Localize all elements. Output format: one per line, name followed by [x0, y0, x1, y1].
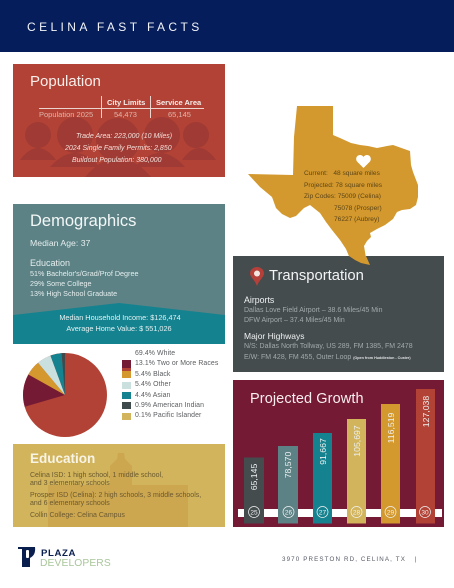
area and zip text: 75078 (Prosper): [334, 205, 382, 212]
income text: [59, 313, 181, 332]
population table: [39, 96, 204, 119]
heading: Demographics: [30, 212, 136, 230]
pie legend: 5.4% Black: [135, 371, 170, 378]
icon: texas shape: [248, 106, 418, 256]
education text: Prosper ISD (Celina): 2 high schools, 3 middle schools,: [30, 492, 201, 499]
icon: school building: [48, 453, 188, 527]
education stats: 13% High School Graduate: [30, 289, 117, 298]
panel: education: [13, 444, 225, 527]
panel: transportation: [233, 256, 444, 372]
education text: Celina ISD: 1 high school, 1 middle school,: [30, 472, 163, 479]
pie legend: 69.4% White: [135, 350, 175, 357]
pie legend: 0.1% Pacific Islander: [135, 412, 201, 419]
bar chart: 105,697: [352, 425, 362, 457]
pie legend: 13.1% Two or More Races: [135, 360, 218, 367]
major highways: [244, 331, 413, 360]
header band: [0, 0, 454, 52]
panel: projected growth: [233, 380, 444, 527]
education text: and 6 elementary schools: [30, 500, 110, 507]
bar chart: 25: [250, 510, 258, 516]
bar chart: 127,038: [421, 396, 431, 427]
airports: [244, 295, 383, 324]
bar chart: 28: [353, 510, 360, 516]
population table: Population 2025: [39, 110, 93, 119]
area and zip text: 76227 (Aubrey): [334, 216, 379, 223]
bar chart: 26: [285, 510, 292, 516]
area and zip text: Projected: 78 square miles: [304, 182, 382, 188]
bar chart: 91,667: [318, 438, 328, 465]
teal income band: [13, 303, 225, 344]
education text: Collin College: Celina Campus: [30, 512, 125, 519]
population stats: 2024 Single Family Permits: 2,850: [65, 145, 172, 152]
heading: Population: [30, 73, 101, 90]
bar chart: 30: [421, 510, 429, 516]
pie legend: 4.4% Asian: [135, 392, 170, 399]
education stats: Education: [30, 258, 70, 268]
population stats: Trade Area: 223,000 (10 Miles): [76, 133, 172, 140]
icon: people silhouettes: [20, 117, 216, 177]
timeline strip: [238, 509, 442, 517]
texas tip overlap: [349, 256, 370, 265]
income text: Average Home Value: $ 551,026: [66, 324, 172, 332]
major highways: N/S: Dallas North Tollway, US 289, FM 1385, FM 2478: [244, 343, 413, 350]
bar chart: 116,519: [386, 412, 396, 443]
population table: Service Area: [156, 98, 201, 106]
pie chart: [23, 353, 107, 437]
education text: and 3 elementary schools: [30, 480, 110, 487]
icon: heart: [356, 155, 371, 168]
population stats: [65, 132, 172, 164]
bar chart: 29: [387, 510, 394, 516]
population table: City Limits: [107, 98, 145, 106]
footer address: 3970 PRESTON RD, CELINA, TX |: [282, 556, 417, 563]
panel: demographics: [13, 204, 225, 344]
median age: Median Age: 37: [30, 238, 90, 248]
area and zip text: Zip Codes: 75009 (Celina): [304, 193, 381, 200]
pie legend: [122, 350, 218, 420]
brand name: PLAZA: [41, 548, 76, 558]
title: CELINA FAST FACTS: [27, 20, 203, 34]
education stats: 51% Bachelor's/Grad/Prof Degree: [30, 269, 138, 278]
airports: Airports: [244, 295, 274, 305]
population stats: Buildout Population: 380,000: [72, 157, 162, 164]
logo: plaza developers: DEVELOPERS: [40, 558, 111, 569]
airports: DFW Airport – 37.4 Miles/45 Min: [244, 317, 345, 324]
icon: map pin: [250, 267, 264, 286]
airports: Dallas Love Field Airport – 38.6 Miles/45 Min: [244, 307, 383, 314]
major highways: E/W: FM 428, FM 455, Outer Loop (Open from Huddleston - Custer): [244, 354, 411, 360]
pie legend: 0.9% American Indian: [135, 402, 204, 409]
area and zip text: Current: 48 square miles: [304, 170, 380, 177]
population table: 65,145: [168, 110, 191, 119]
area and zip text: [304, 170, 382, 223]
heading: Transportation: [269, 268, 364, 284]
icon: logo mark: [18, 547, 36, 567]
income text: Median Household Income: $126,474: [59, 313, 181, 322]
pie legend: 5.4% Other: [135, 381, 171, 388]
bar chart: 65,145: [249, 464, 259, 490]
population table: 54,473: [114, 110, 137, 119]
education text: [30, 472, 201, 519]
education stats: 29% Some College: [30, 279, 92, 288]
bar chart: [244, 389, 435, 524]
education stats: [30, 258, 138, 298]
panel: population: [13, 64, 225, 177]
bar chart: 27: [319, 510, 326, 516]
major highways: Major Highways: [244, 331, 304, 341]
heading: Education: [30, 451, 95, 466]
heading: Projected Growth: [250, 391, 364, 407]
bar chart: 78,570: [283, 452, 293, 478]
logo: plaza developers: [18, 547, 111, 569]
texas map: [248, 106, 418, 256]
